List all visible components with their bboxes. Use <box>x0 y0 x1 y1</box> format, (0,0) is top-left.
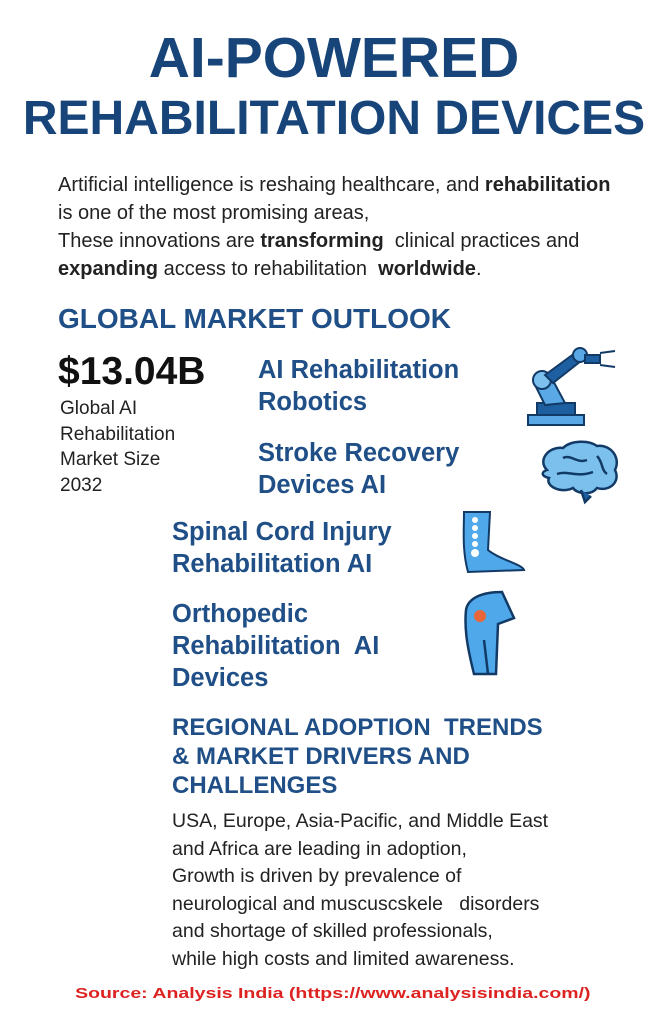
item: orthopedic <box>172 600 379 692</box>
source: Source: Analysis India (https://www.analysisindia.com/) <box>75 985 591 1002</box>
heading: regional: REGIONAL ADOPTION TRENDS <box>172 714 543 741</box>
stat: market size: 2032 <box>60 474 102 496</box>
item: robotics <box>258 356 459 416</box>
intro text: Artificial intelligence is reshaing healthcare, and rehabilitation <box>58 174 610 196</box>
regional text: neurological and muscuscskele disorders <box>172 893 539 915</box>
item: spinal <box>172 518 392 578</box>
stat: market size: Rehabilitation <box>60 424 175 444</box>
item: robotics: Robotics <box>258 388 367 416</box>
subtitle: REHABILITATION DEVICES <box>23 92 645 145</box>
heading: regional: & MARKET DRIVERS AND <box>172 743 470 770</box>
regional text: USA, Europe, Asia-Pacific, and Middle East <box>172 810 548 832</box>
heading: regional <box>172 714 543 799</box>
regional text: and shortage of skilled professionals, <box>172 920 493 942</box>
intro text: is one of the most promising areas, <box>58 202 369 224</box>
intro text: These innovations are transforming clinical practices and <box>58 230 579 252</box>
item: robotics: AI Rehabilitation <box>258 356 459 384</box>
item: orthopedic: Rehabilitation AI <box>172 632 379 660</box>
stat: market size <box>58 350 205 496</box>
regional text: while high costs and limited awareness. <box>172 948 515 970</box>
stat: market size: Global AI <box>60 398 137 419</box>
stat: market size: $13.04B <box>58 350 205 393</box>
icon: spine <box>462 511 526 573</box>
intro text: expanding access to rehabilitation worldwide. <box>58 258 482 280</box>
intro text <box>58 174 610 280</box>
item: stroke: Stroke Recovery <box>258 439 459 467</box>
item: orthopedic: Orthopedic <box>172 600 308 628</box>
regional text: Growth is driven by prevalence of <box>172 865 461 887</box>
icon: brain <box>542 440 618 504</box>
regional text <box>172 810 548 970</box>
stat: market size: Market Size <box>60 449 160 470</box>
heading: global market outlook: GLOBAL MARKET OUTLOOK <box>58 303 451 334</box>
item: spinal: Rehabilitation AI <box>172 550 372 578</box>
icon: robot arm <box>527 347 616 426</box>
heading: regional: CHALLENGES <box>172 772 337 799</box>
icon: knee <box>464 590 516 676</box>
item: stroke: Devices AI <box>258 471 386 499</box>
item: spinal: Spinal Cord Injury <box>172 518 392 546</box>
regional text: and Africa are leading in adoption, <box>172 838 467 860</box>
item: stroke <box>258 439 460 499</box>
item: orthopedic: Devices <box>172 664 268 692</box>
title: AI-POWERED <box>149 26 519 90</box>
